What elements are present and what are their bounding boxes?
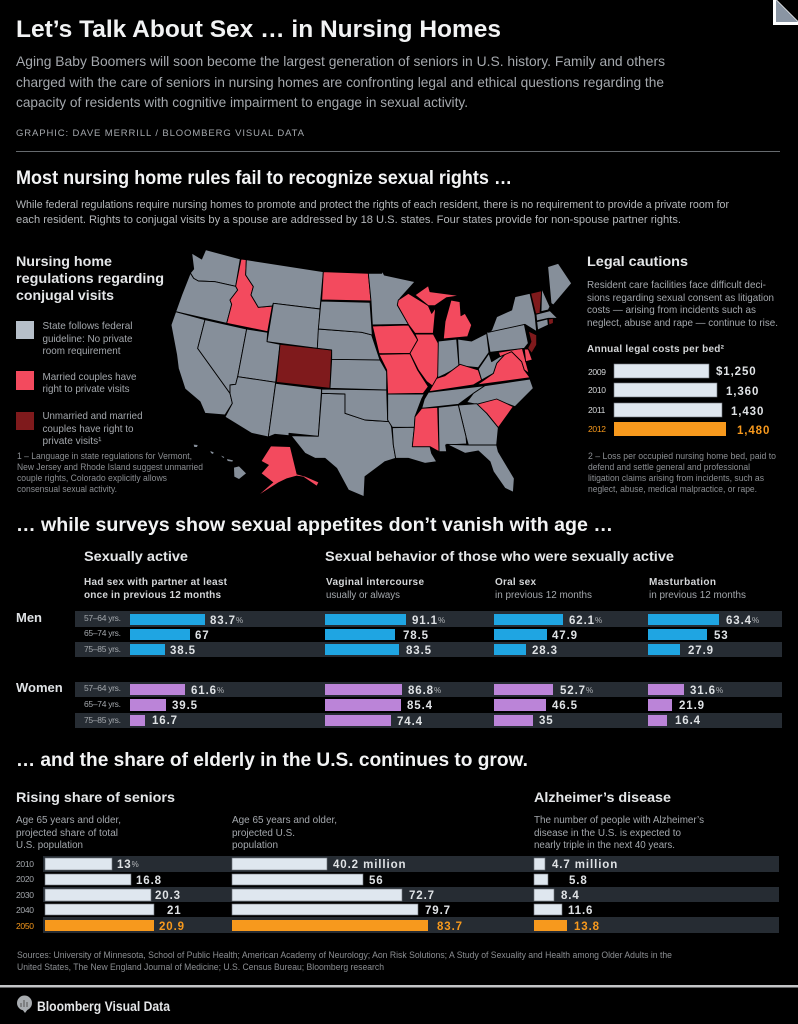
heading: sexual rights: Most nursing home rules fail to recognize sexual rights … [16, 168, 512, 189]
bars: share of population: % [132, 860, 139, 869]
bar chart: annual legal costs per bed: 1,360 [726, 386, 759, 398]
bar chart: seniors, population and Alzheimer's by year: 2010 [16, 859, 34, 869]
text: legal cautions paragraph: costs — arising from incidents such as [587, 304, 756, 316]
legend item: federal guideline: room requirement [42, 345, 121, 357]
panel: rising share and Alzheimer's headings: The number of people with Alzheimer’s [534, 815, 704, 826]
bar chart: women: 85.4 [407, 700, 433, 712]
bar chart: women: 16.7 [152, 715, 178, 727]
panel: survey column headings: Masturbation [649, 577, 716, 588]
bar chart: women: 75–85 yrs. [84, 715, 121, 725]
bar chart: men: % [236, 616, 243, 625]
sources [17, 950, 672, 972]
footnote 1 [17, 451, 203, 494]
legend item: federal guideline: State follows federal [42, 320, 132, 332]
panel: rising share and Alzheimer's headings: population [232, 840, 278, 851]
bar chart: women: 57–64 yrs. [84, 683, 121, 693]
bar chart: women [16, 680, 782, 728]
bar chart: women: Women [16, 680, 63, 695]
bars: U.S. population: 72.7 [409, 890, 435, 902]
heading: legal cautions: Legal cautions [587, 253, 688, 269]
bars: U.S. population: 79.7 [425, 905, 451, 917]
text: legal cautions paragraph: Resident care facilities face difficult deci- [587, 279, 766, 291]
bar chart: women: % [586, 686, 593, 695]
heading: conjugal visits: conjugal visits [16, 287, 114, 303]
bar chart: women: % [434, 686, 441, 695]
bar chart: annual legal costs per bed: $1,250 [716, 366, 757, 378]
bar chart: annual legal costs per bed: 1,480 [737, 425, 770, 437]
bar chart: women: 74.4 [397, 716, 423, 728]
bar chart: men: 57–64 yrs. [84, 613, 121, 623]
footnote 1: couple rights, Colorado explicitly allows [17, 473, 167, 483]
intro text [16, 53, 665, 110]
footnote 2: defend and settle general and professional [588, 462, 750, 472]
footer: Bloomberg Visual Data: Bloomberg Visual Data [37, 999, 170, 1014]
legend item: unmarried and married: private visits¹ [42, 435, 102, 447]
bar chart: women: 52.7 [560, 685, 586, 697]
footnote 2: 2 – Loss per occupied nursing home bed, paid to [588, 451, 776, 461]
footnote 2: neglect, abuse, medical malpractice, or rape. [588, 484, 757, 494]
footnote 1: New Jersey and Rhode Island suggest unmarried [17, 462, 203, 472]
bar chart: women: % [217, 686, 224, 695]
panel: legal cautions [587, 253, 778, 494]
heading: conjugal visits: Nursing home [16, 253, 112, 269]
bar chart: men: % [438, 616, 445, 625]
panel: rising share and Alzheimer's headings: U.S. population [16, 840, 83, 851]
legend item: unmarried and married [16, 410, 143, 447]
bar chart: men: 65–74 yrs. [84, 628, 121, 638]
panel: survey column headings: Sexually active [84, 548, 188, 564]
legend item: federal guideline [16, 320, 133, 357]
bar chart: seniors, population and Alzheimer's by year [16, 856, 779, 933]
bar chart: women: 46.5 [552, 700, 578, 712]
bar chart: men: 27.9 [688, 645, 714, 657]
panel: survey column headings: Had sex with partner at least [84, 577, 228, 588]
bar chart: women: 61.6 [191, 685, 217, 697]
bar chart: women: 31.6 [690, 685, 716, 697]
bar chart: men: 78.5 [403, 630, 429, 642]
bar chart: men [16, 610, 782, 657]
footer: Bloomberg Visual Data [17, 996, 170, 1014]
heading: conjugal visits [16, 253, 164, 303]
panel: survey column headings: in previous 12 months [649, 590, 746, 601]
intro text: charged with the care of seniors in nursing homes are confronting legal and ethical questions regarding the [16, 74, 664, 90]
bar chart: men: 47.9 [552, 630, 578, 642]
bars: share of population [45, 858, 185, 933]
icon: Bloomberg speech bubble [17, 996, 32, 1013]
panel: survey column headings: in previous 12 months [495, 590, 592, 601]
title: Let’s Talk About Sex … in Nursing Homes [16, 16, 501, 43]
bar chart: annual legal costs per bed: 1,430 [731, 406, 764, 418]
bar chart: men: 53 [714, 630, 729, 642]
bar chart: men: 28.3 [532, 645, 558, 657]
bars: share of population: 13 [117, 859, 132, 871]
icon: page corner fold [773, 0, 798, 25]
panel: rising share and Alzheimer's headings: Alzheimer’s disease [534, 789, 671, 805]
legend item: married couples: right to private visits [42, 383, 130, 395]
bar chart: men: 63.4 [726, 615, 752, 627]
panel: rising share and Alzheimer's headings: disease in the U.S. is expected to [534, 828, 681, 839]
bar chart: men: % [595, 616, 602, 625]
bars: U.S. population: 40.2 million [333, 859, 406, 871]
bar chart: men: 83.7 [210, 615, 236, 627]
bars: share of population: 21 [167, 905, 182, 917]
sources: Sources: University of Minnesota, School of Public Health; American Academy of Neurology; Aon Risk Solutions; A Study of Sexuality and Health among Older Adults in the [17, 950, 672, 960]
bars: Alzheimer's disease [534, 858, 618, 933]
bar chart: men: 67 [195, 630, 210, 642]
heading: annual legal costs: Annual legal costs per bed² [587, 344, 725, 355]
panel: rising share and Alzheimer's headings: Rising share of seniors [16, 789, 175, 805]
panel: rising share and Alzheimer's headings [16, 789, 704, 851]
panel: rising share and Alzheimer's headings: Age 65 years and older, [16, 815, 121, 826]
footnote 1: 1 – Language in state regulations for Vermont, [17, 451, 192, 461]
footnote 1: consensual sexual activity. [17, 484, 117, 494]
intro text: capacity of residents with cognitive impairment to engage in sexual activity. [16, 94, 468, 110]
text: federal regulations paragraph: each resident. Rights to conjugal visits by a spouse are addressed by 18 U.S. states. Four states provide for non-spouse partner rights. [16, 214, 681, 226]
bar chart: women: % [716, 686, 723, 695]
bar chart: seniors, population and Alzheimer's by year: 2040 [16, 905, 34, 915]
bar chart: men: 75–85 yrs. [84, 644, 121, 654]
footnote 2 [588, 451, 776, 494]
bars: U.S. population: 56 [369, 875, 384, 887]
panel: survey column headings: once in previous 12 months [84, 590, 221, 601]
legend item: federal guideline: guideline: No private [42, 333, 133, 345]
panel: rising share and Alzheimer's headings: projected U.S. [232, 828, 295, 839]
panel: survey column headings [84, 548, 746, 601]
map: U.S. states by conjugal visit regulation [171, 250, 572, 497]
bar chart: men: 91.1 [412, 615, 438, 627]
bar chart: annual legal costs per bed: 2011 [588, 405, 606, 415]
intro text: Aging Baby Boomers will soon become the largest generation of seniors in U.S. history. Family and others [16, 53, 665, 69]
bars: U.S. population [232, 858, 463, 933]
bar chart: women: 39.5 [172, 700, 198, 712]
bar chart: women: 35 [539, 715, 554, 727]
text: federal regulations paragraph: While federal regulations require nursing homes to promote and protect the rights of each resident, there is no requirement to provide a private room for [16, 199, 729, 211]
bar chart: women: 21.9 [679, 700, 705, 712]
bar chart: men: 62.1 [569, 615, 595, 627]
text: legal cautions paragraph [587, 279, 778, 329]
legend item: unmarried and married: couples have right to [42, 423, 134, 435]
bar chart: annual legal costs per bed [588, 364, 770, 437]
bars: Alzheimer's disease: 11.6 [568, 905, 593, 917]
bars: share of population: 20.3 [155, 890, 181, 902]
bar chart: seniors, population and Alzheimer's by year: 2030 [16, 890, 34, 900]
panel: rising share and Alzheimer's headings: projected share of total [16, 828, 118, 839]
legend: map [16, 320, 143, 447]
text: federal regulations paragraph [16, 199, 729, 226]
panel: rising share and Alzheimer's headings: nearly triple in the next 40 years. [534, 840, 675, 851]
legend item: married couples: Married couples have [42, 371, 137, 383]
bar chart: women: 65–74 yrs. [84, 699, 121, 709]
text: legal cautions paragraph: sions regarding sexual consent as litigation [587, 292, 774, 304]
panel: rising share and Alzheimer's headings: Age 65 years and older, [232, 815, 337, 826]
heading: share of elderly: … and the share of elderly in the U.S. continues to grow. [16, 750, 528, 771]
bar chart: men: 83.5 [406, 645, 432, 657]
panel: survey column headings: Oral sex [495, 577, 536, 588]
graphic credit: GRAPHIC: DAVE MERRILL / BLOOMBERG VISUAL DATA [16, 128, 305, 139]
bars: U.S. population: 83.7 [437, 921, 463, 933]
sources: United States, The New England Journal of Medicine; U.S. Census Bureau; Bloomberg research [17, 962, 384, 972]
bar chart: women: 16.4 [675, 715, 701, 727]
legend item: unmarried and married: Unmarried and married [42, 410, 143, 422]
heading: conjugal visits: regulations regarding [16, 270, 164, 286]
bar chart: men: % [752, 616, 759, 625]
heading: surveys: … while surveys show sexual appetites don’t vanish with age … [16, 515, 613, 536]
bar chart: annual legal costs per bed: 2009 [588, 367, 606, 377]
bars: share of population: 16.8 [136, 875, 162, 887]
bars: Alzheimer's disease: 13.8 [574, 921, 600, 933]
panel: survey column headings: usually or always [326, 590, 400, 601]
bars: share of population: 20.9 [159, 921, 185, 933]
bar chart: women: 86.8 [408, 685, 434, 697]
panel: survey column headings: Vaginal intercourse [326, 577, 424, 588]
bar chart: men: Men [16, 610, 42, 625]
bar chart: men: 38.5 [170, 645, 196, 657]
text: legal cautions paragraph: neglect, abuse and rape — continue to rise. [587, 317, 778, 329]
panel: survey column headings: Sexual behavior of those who were sexually active [325, 548, 674, 564]
bar chart: annual legal costs per bed: 2010 [588, 385, 606, 395]
legend item: married couples [16, 371, 137, 395]
bar chart: seniors, population and Alzheimer's by year: 2020 [16, 874, 34, 884]
footnote 2: litigation claims arising from incidents, such as [588, 473, 764, 483]
bar chart: annual legal costs per bed: 2012 [588, 424, 606, 434]
bars: Alzheimer's disease: 4.7 million [552, 859, 618, 871]
bars: Alzheimer's disease: 8.4 [561, 890, 580, 902]
bars: Alzheimer's disease: 5.8 [569, 875, 588, 887]
bar chart: seniors, population and Alzheimer's by year: 2050 [16, 921, 34, 931]
